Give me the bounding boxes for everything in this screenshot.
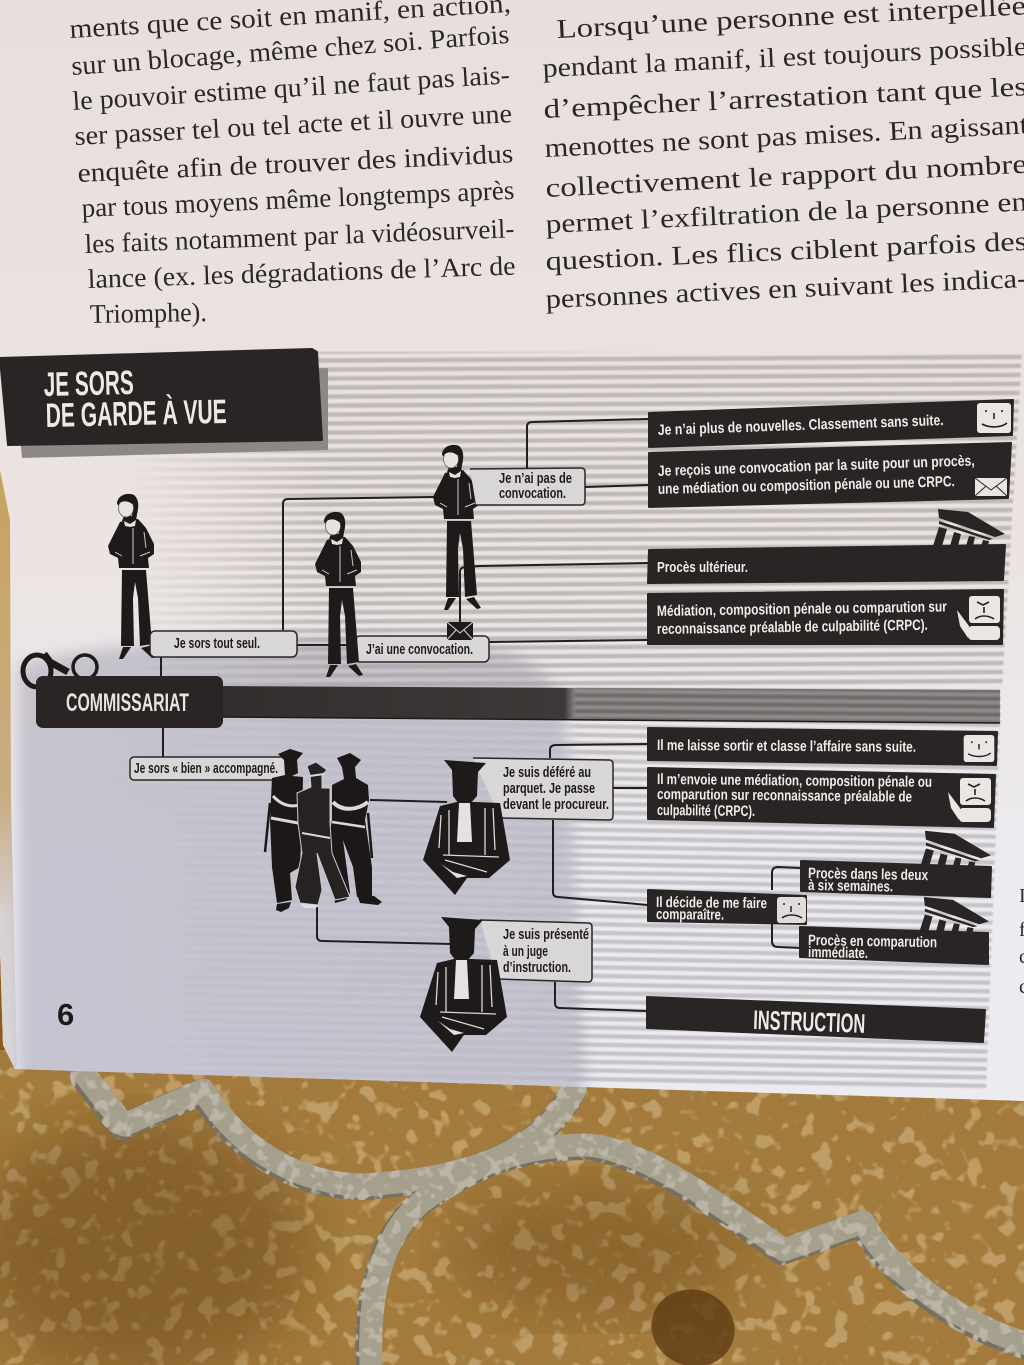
text column left: les faits notamment par la vidéosurveil- bbox=[84, 213, 515, 259]
bar: médiation parquet: Il m’envoie une médiation, composition pénale ou bbox=[657, 771, 932, 791]
arrested person bbox=[295, 762, 350, 908]
label: je sors tout seul bbox=[150, 631, 297, 657]
person: no summons bbox=[433, 445, 481, 610]
bleed letters on page edge bbox=[1019, 885, 1024, 998]
bar: comparution immédiate: immédiate. bbox=[808, 944, 868, 962]
commissariat label: COMMISSARIAT bbox=[66, 689, 189, 717]
label: je sors tout seul: Je sors tout seul. bbox=[174, 636, 260, 652]
label: juge d'instruction: à un juge bbox=[503, 944, 548, 960]
text column left: le pouvoir estime qu’il ne faut pas lais- bbox=[72, 59, 511, 116]
bar: classe l'affaire bbox=[648, 728, 997, 765]
officer left bbox=[265, 749, 303, 912]
book spine edge bbox=[0, 470, 17, 1069]
commissariat label bbox=[36, 676, 223, 728]
label: juge d'instruction bbox=[480, 920, 592, 982]
bar: médiation parquet bbox=[648, 768, 995, 827]
label: déféré au parquet bbox=[473, 758, 613, 820]
striped background upper bbox=[158, 352, 1022, 687]
bar: médiation: Médiation, composition pénale ou comparution sur bbox=[657, 598, 947, 620]
bar: comparution immédiate bbox=[800, 927, 988, 964]
bar: décide de comparaître: Il décide de me faire bbox=[656, 894, 767, 912]
text column left: ser passer tel ou tel acte et il ouvre une bbox=[74, 98, 513, 151]
icon: handcuffs bbox=[23, 654, 97, 687]
bar: médiation parquet: culpabilité (CRPC). bbox=[657, 802, 755, 820]
icon: courthouse two to six weeks bbox=[920, 831, 991, 867]
bar: procès deux à six semaines: à six semaines. bbox=[808, 877, 893, 895]
bar: convocation par la suite: une médiation ou composition pénale ou une CRPC. bbox=[658, 473, 955, 498]
text column right: d’empêcher l’arrestation tant que les bbox=[543, 71, 1024, 124]
text column right: menottes ne sont pas mises. En agissant bbox=[544, 109, 1024, 163]
text column left: par tous moyens même longtemps après bbox=[81, 175, 515, 223]
label: je n'ai pas de convocation bbox=[470, 468, 585, 505]
bar: procès ultérieur: Procès ultérieur. bbox=[657, 559, 748, 576]
label: je n'ai pas de convocation: convocation. bbox=[499, 486, 566, 502]
text column right: personnes actives en suivant les indica- bbox=[545, 263, 1024, 314]
commissariat band bbox=[215, 686, 1000, 723]
floor tile grout bbox=[83, 1075, 1024, 1365]
person: with summons bbox=[315, 512, 363, 677]
label: juge d'instruction: d’instruction. bbox=[503, 960, 571, 976]
bar: instruction bbox=[647, 997, 985, 1042]
text column right: pendant la manif, il est toujours possible bbox=[542, 31, 1024, 83]
person: leaving alone bbox=[108, 494, 156, 659]
bar: comparution immédiate: Procès en comparution bbox=[808, 932, 937, 951]
bar: classement sans suite: Je n’ai plus de nouvelles. Classement sans suite. bbox=[658, 412, 944, 439]
bar: procès ultérieur bbox=[648, 545, 1005, 583]
label: je sors bien accompagné bbox=[130, 757, 290, 780]
bar: médiation: reconnaissance préalable de culpabilité (CRPC). bbox=[657, 617, 928, 638]
title block: JE SORS bbox=[43, 364, 134, 404]
bar: procès deux à six semaines: Procès dans les deux bbox=[808, 865, 929, 884]
text column right: collectivement le rapport du nombre bbox=[545, 149, 1024, 203]
text column left bbox=[69, 0, 516, 329]
text column left: enquête afin de trouver des individus bbox=[77, 138, 514, 188]
bar: décide de comparaître: comparaître. bbox=[656, 906, 724, 924]
officer right bbox=[328, 753, 382, 905]
striped background lower bbox=[368, 722, 1000, 1088]
icon: crying face bbox=[777, 897, 806, 923]
text column left: lance (ex. les dégradations de l’Arc de bbox=[87, 251, 516, 294]
title block: DE GARDE À VUE bbox=[45, 393, 227, 435]
bar: convocation par la suite bbox=[649, 443, 1011, 507]
label: j'ai une convocation: J’ai une convocation. bbox=[366, 642, 473, 658]
label: j'ai une convocation bbox=[355, 636, 489, 662]
bar: médiation bbox=[648, 590, 1003, 644]
police group bbox=[265, 749, 382, 912]
text column right: permet l’exfiltration de la personne en bbox=[545, 186, 1024, 239]
icon: white envelope bbox=[975, 478, 1007, 496]
text column right bbox=[542, 0, 1024, 314]
bar: procès deux à six semaines bbox=[801, 861, 991, 897]
bar: classement sans suite bbox=[649, 400, 1013, 447]
text column right: question. Les flics ciblent parfois des bbox=[545, 226, 1024, 276]
magistrate: procureur bbox=[423, 760, 510, 895]
floor background bbox=[0, 1050, 1024, 1365]
label: déféré au parquet: Je suis déféré au bbox=[503, 765, 591, 781]
label: déféré au parquet: parquet. Je passe bbox=[503, 781, 595, 797]
icon: courthouse bbox=[933, 509, 1005, 546]
icon: courthouse immediate bbox=[919, 897, 989, 933]
paper shade bbox=[18, 638, 585, 1110]
text column left: sur un blocage, même chez soi. Parfois bbox=[70, 19, 510, 81]
page number: 6 bbox=[57, 997, 74, 1032]
label: je n'ai pas de convocation: Je n’ai pas de bbox=[499, 471, 572, 487]
bar: médiation parquet: comparution sur reconnaissance préalable de bbox=[657, 786, 912, 806]
text column left: Triomphe). bbox=[90, 297, 207, 329]
bar: décide de comparaître bbox=[648, 890, 806, 924]
icon: envelope bbox=[447, 622, 473, 640]
magistrate: juge d'instruction bbox=[420, 917, 507, 1052]
label: je sors bien accompagné: Je sors « bien » accompagné. bbox=[134, 761, 278, 777]
label: déféré au parquet: devant le procureur. bbox=[503, 797, 609, 813]
label: juge d'instruction: Je suis présenté bbox=[503, 927, 589, 943]
bar: classe l'affaire: Il me laisse sortir et classe l’affaire sans suite. bbox=[657, 737, 916, 756]
title block bbox=[0, 349, 328, 458]
bar: instruction: INSTRUCTION bbox=[753, 1005, 866, 1039]
connector lines bbox=[161, 419, 801, 1011]
